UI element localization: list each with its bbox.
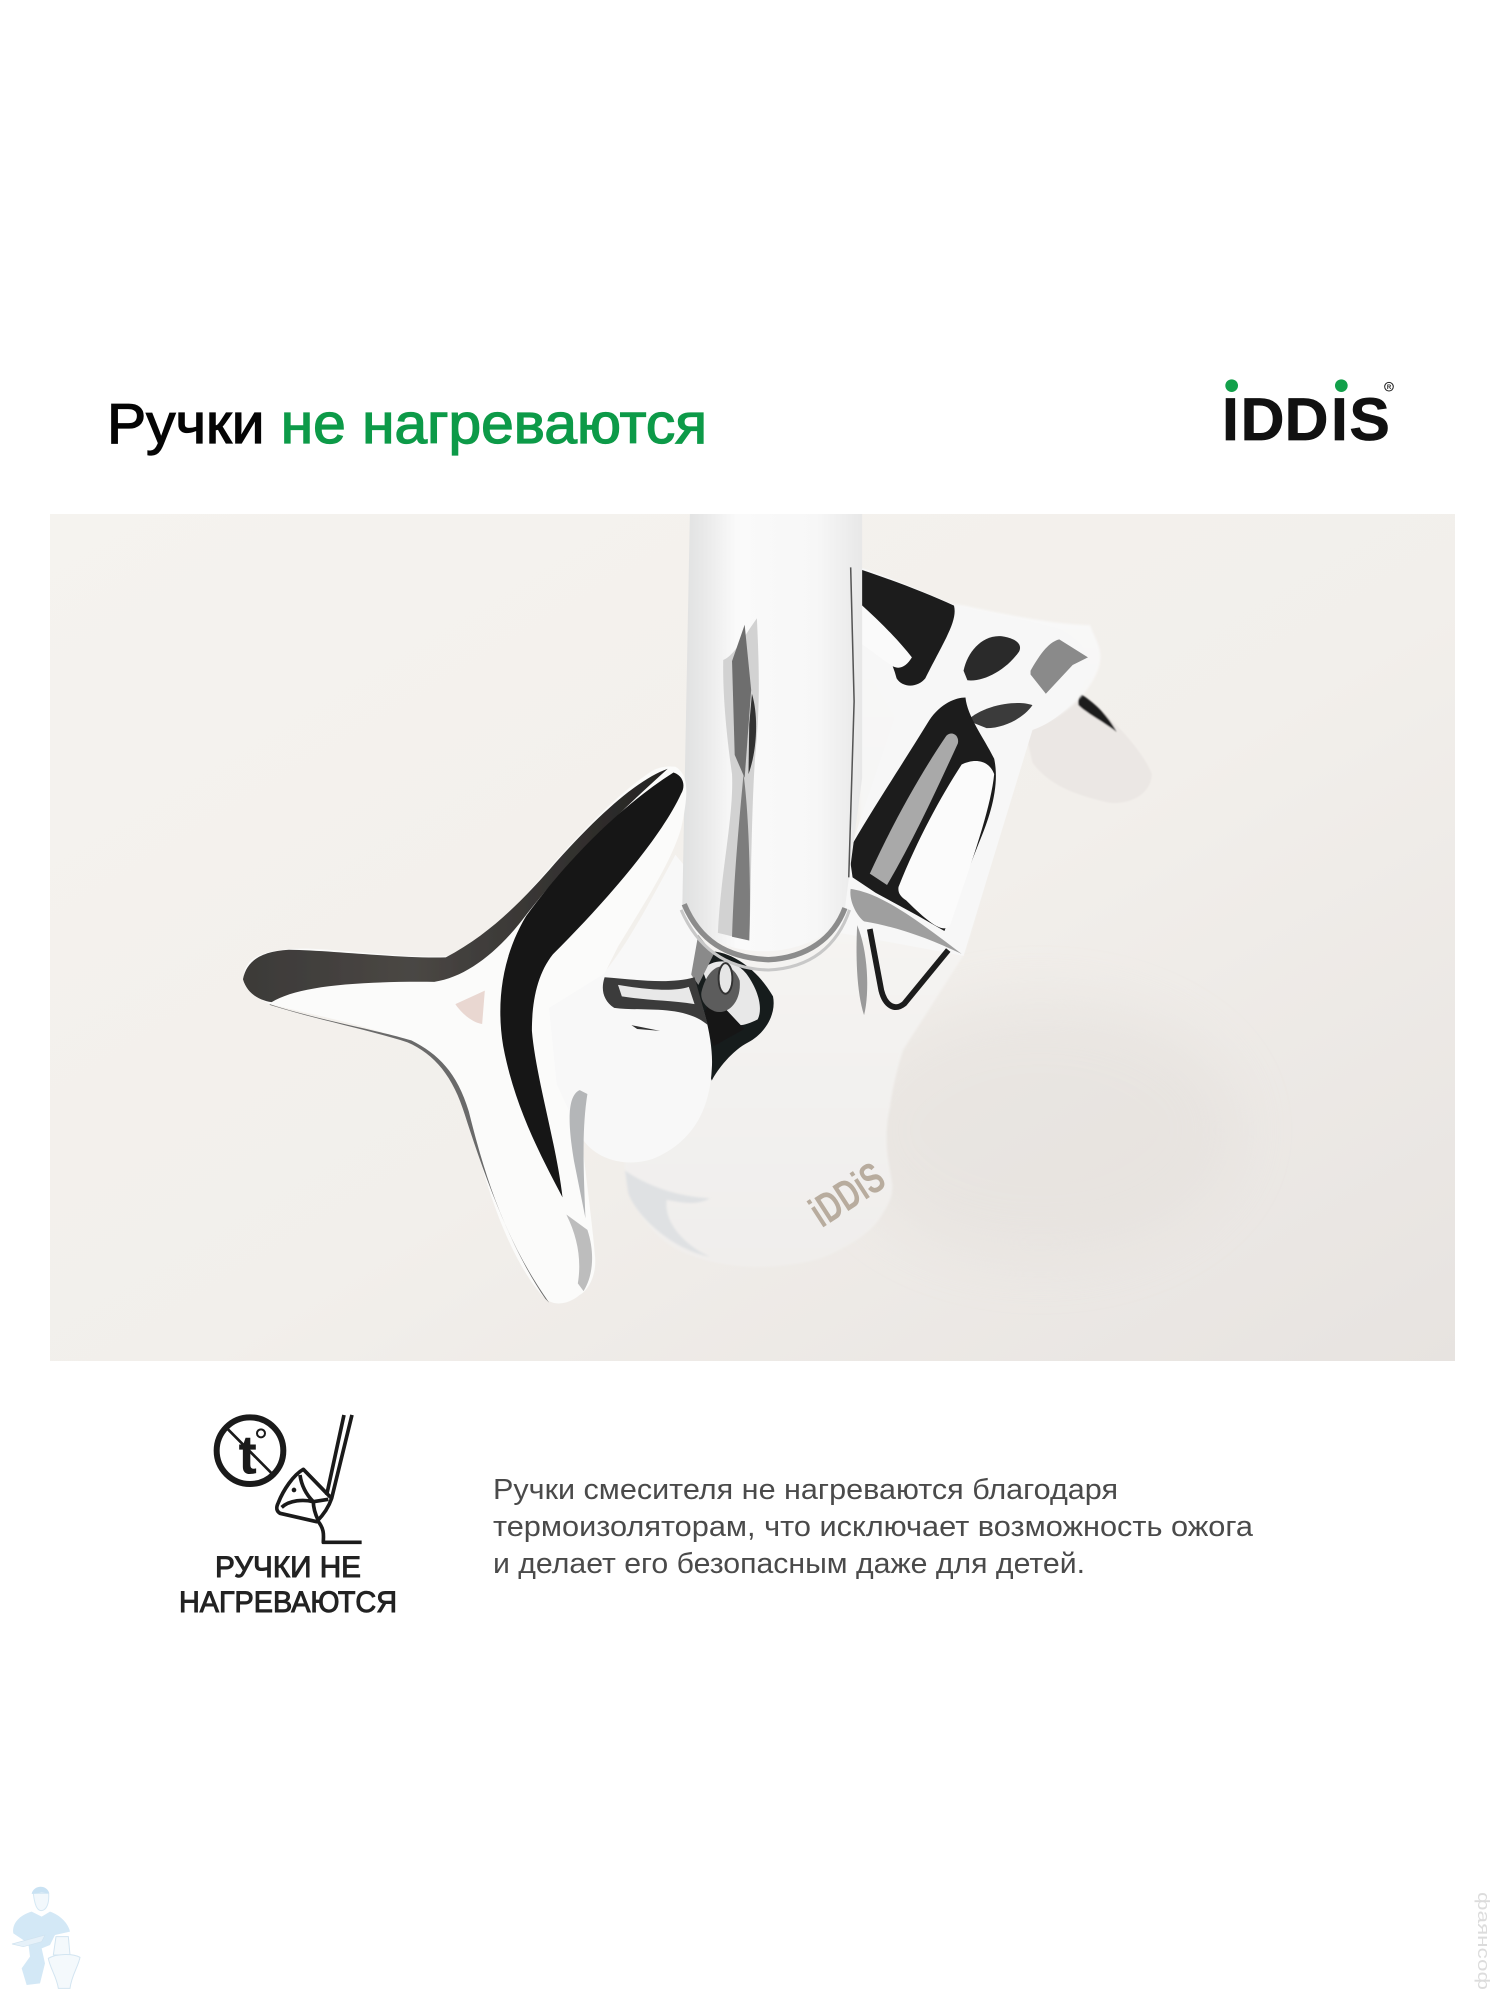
logo: IDDIS: R [1387, 385, 1392, 391]
right handle reflections [830, 567, 1089, 1015]
icon label: РУЧКИ НЕ [215, 1551, 361, 1584]
engraved base details [625, 1153, 894, 1257]
icon: crossed temperature [217, 1417, 283, 1485]
description text: и делает его безопасным даже для детей. [493, 1548, 1085, 1580]
faucet back petal of right handle [1025, 692, 1152, 803]
logo: IDDIS: IDDIS [1222, 385, 1390, 453]
watermark: vertical site name: фаянсоф [1474, 1892, 1493, 1990]
feature icon with label [217, 1415, 362, 1542]
left hub and stem [545, 855, 774, 1162]
description text [493, 1474, 1254, 1580]
title: Ручки не нагреваются [107, 392, 707, 456]
icon: handle on faucet stem [277, 1415, 362, 1542]
watermark: plumber with toilet [12, 1887, 80, 1988]
engraved base details: iDDiS [801, 1153, 894, 1237]
soft shadow on surface [840, 1000, 1240, 1260]
faucet left three-lobed handle [243, 767, 686, 1303]
description text: термоизоляторам, что исключает возможность ожога [493, 1511, 1254, 1543]
faucet column with reflection and ring [681, 512, 862, 1012]
description text: Ручки смесителя не нагреваются благодаря [493, 1474, 1118, 1506]
icon: crossed temperature: t [239, 1423, 257, 1485]
product photo: chrome faucet [50, 512, 1455, 1361]
icon label: НАГРЕВАЮТСЯ [179, 1586, 397, 1619]
faucet body and base [829, 605, 1100, 1218]
icon label [179, 1551, 397, 1619]
